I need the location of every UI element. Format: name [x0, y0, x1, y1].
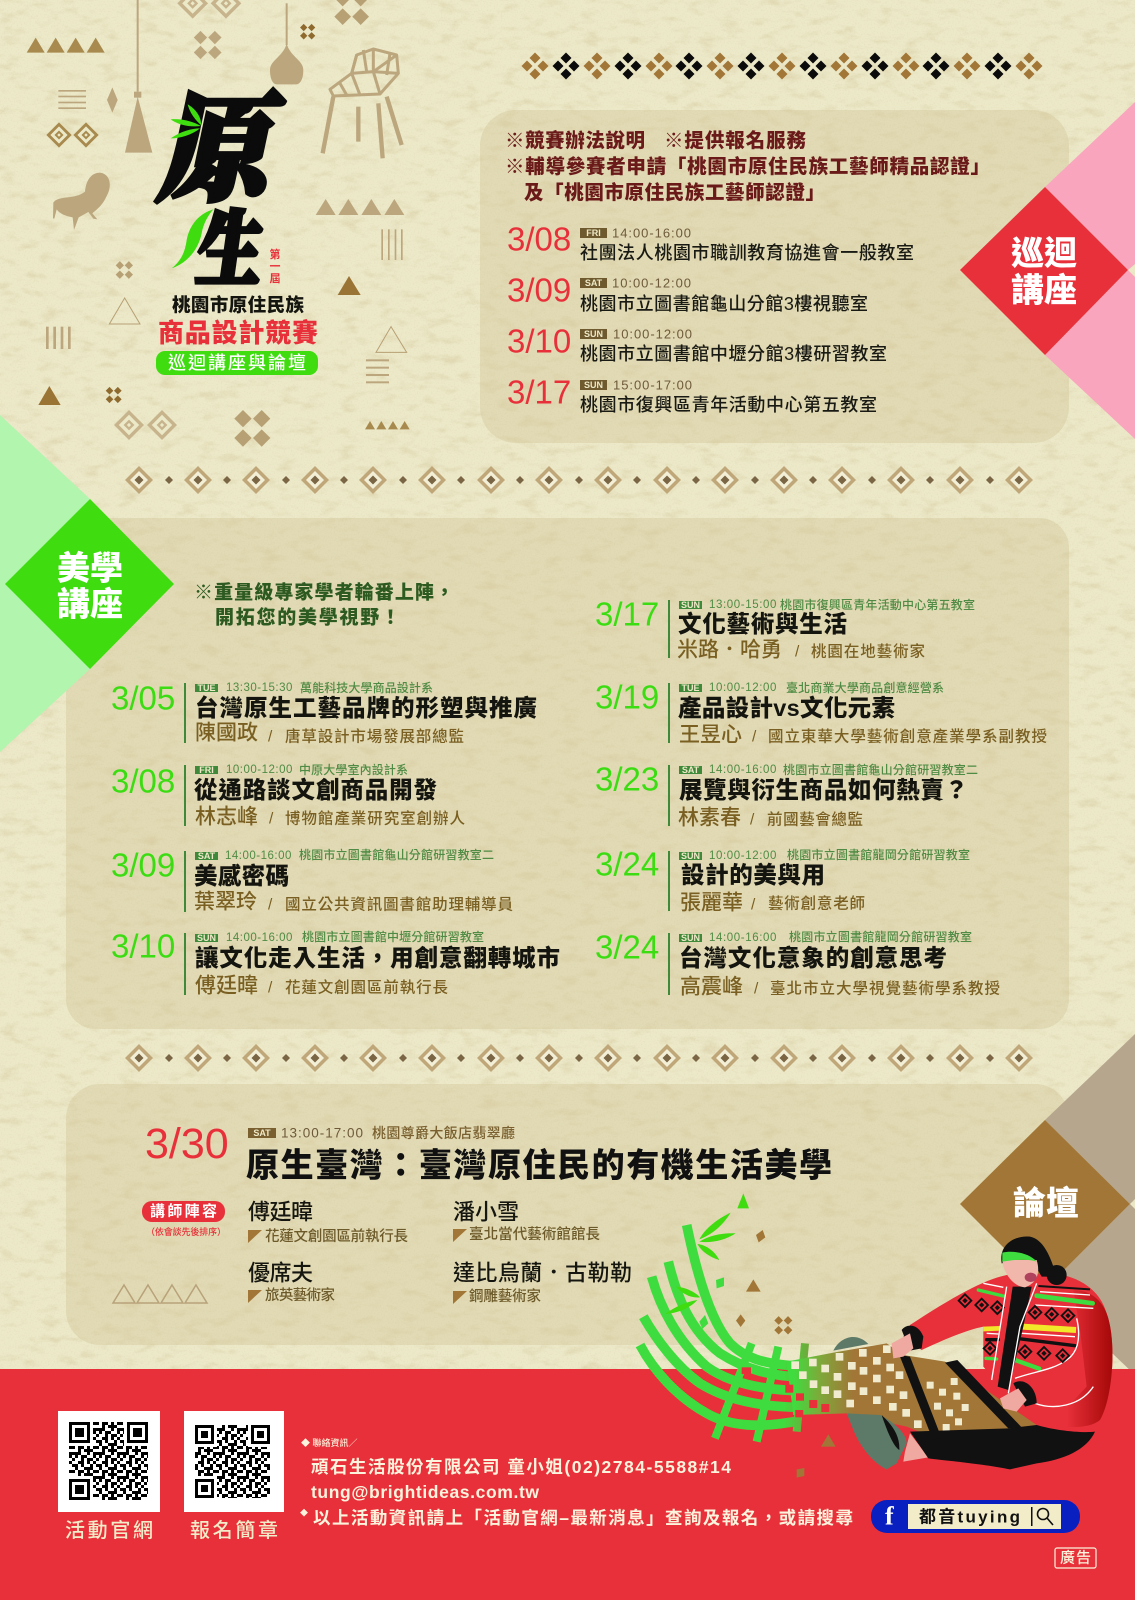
talk 3/17: 桃園市復興區青年活動中心第五教室: [780, 597, 975, 612]
tour row 3/09: 10:00-12:00: [612, 276, 691, 290]
talk 3/08: [111, 762, 465, 828]
icon: round pendant lamp: [270, 3, 303, 84]
contact note: 以上活動資訊請上「活動官網–最新消息」查詢及報名，或請搜尋: [313, 1508, 853, 1528]
talk 3/08: 博物館產業研究室創辦人: [285, 808, 465, 828]
talk 3/24 afternoon: 台灣文化意象的創意思考: [679, 944, 947, 971]
four diamonds brown small: [106, 387, 122, 403]
talk 3/17: 米路．哈勇: [677, 638, 782, 662]
talk 3/23: 前國藝會總監: [767, 810, 863, 828]
tour notes: ※競賽辦法說明: [505, 129, 645, 152]
weave gaps: [742, 1367, 829, 1417]
forum session info: 13:00-17:00: [281, 1126, 363, 1140]
vertical bars right: [381, 229, 403, 260]
tour row 3/08: 14:00-16:00: [612, 226, 691, 240]
talk 3/05: 陳國政: [195, 722, 258, 744]
talk 3/24 afternoon: [595, 928, 1000, 998]
black skirt: [910, 1425, 1095, 1469]
diamond band top: [522, 52, 1042, 80]
talk 3/19: 3/19: [595, 678, 659, 716]
outline triangle right: [376, 327, 407, 352]
talk 3/17: 桃園在地藝術家: [811, 642, 925, 660]
icon: tall diamond: [107, 87, 118, 113]
scattered shapes: [699, 1193, 836, 1478]
tour notes: [505, 129, 990, 204]
tour row 3/10: 10:00-12:00: [613, 326, 692, 342]
taupe side diamonds: [1045, 1034, 1135, 1375]
QR label: 活動官網: [65, 1519, 153, 1542]
advertisement mark: 廣告: [1060, 1548, 1091, 1566]
icon: lounge chair: [53, 173, 110, 230]
contact label: ◆ 聯絡資訊／: [301, 1437, 358, 1448]
talk 3/08: /: [269, 810, 274, 828]
talk 3/19: 國立東華大學藝術創意產業學系副教授: [768, 726, 1047, 746]
speaker 1: 花蓮文創園區前執行長: [265, 1227, 408, 1245]
talk 3/24 morning: 10:00-12:00: [709, 850, 777, 862]
talk 3/17: 13:00-15:00: [709, 599, 777, 611]
four diamonds bottom: [234, 410, 270, 447]
speaker 2: 臺北當代藝術館館長: [469, 1225, 600, 1243]
talk 3/23: 林素春: [678, 806, 741, 830]
facebook search pill: f: [885, 1502, 894, 1530]
QR label: 報名簡章: [190, 1519, 278, 1542]
woven green strips: [640, 1225, 807, 1442]
speaker badge: 講師陣容: [150, 1202, 217, 1220]
talk 3/10: [111, 928, 560, 998]
green diamond badge: aesthetics lectures: 講座: [57, 586, 123, 622]
talk 3/09: 3/09: [111, 846, 175, 884]
tour row 3/09: [507, 272, 868, 314]
tour row 3/09: 桃園市立圖書館龜山分館3樓視聽室: [580, 294, 868, 314]
horizontal lines right: [366, 359, 389, 383]
talk 3/24 morning: 3/24: [595, 846, 659, 882]
panel: tour lectures background: [480, 110, 1069, 443]
speaker 2: 潘小雪: [453, 1200, 519, 1224]
talk 3/10: 3/10: [111, 928, 175, 964]
bamboo leaves: [665, 1213, 736, 1314]
contact note: ◆: [300, 1508, 308, 1518]
tour row 3/17: 15:00-17:00: [613, 378, 692, 392]
panel: tour lectures content: [505, 129, 990, 415]
talk 3/09: /: [268, 896, 273, 914]
talk 3/19: 10:00-12:00: [709, 682, 777, 694]
talk 3/24 morning: 設計的美與用: [681, 861, 825, 888]
tour row 3/10: [507, 322, 887, 364]
decorative icons around logo: [27, 0, 410, 447]
speaker badge: （依會談先後排序）: [146, 1226, 226, 1237]
dotted divider 2: [125, 1044, 1033, 1072]
red footer band: [0, 1369, 1135, 1600]
tour row 3/17: 桃園市復興區青年活動中心第五教室: [580, 395, 877, 415]
speaker 3: [248, 1260, 336, 1304]
talk 3/23: 3/23: [595, 760, 659, 798]
talk 3/05: 台灣原生工藝品牌的形塑與推廣: [195, 694, 537, 721]
speaker 3: 旅英藝術家: [265, 1286, 336, 1304]
advertisement mark: [1055, 1548, 1096, 1568]
outline triangles: [113, 1285, 207, 1303]
facebook search pill: 都音tuying: [919, 1506, 1020, 1526]
forum date: 3/30: [145, 1120, 229, 1168]
nested diamonds bottom: [114, 410, 177, 440]
talk 3/23: 14:00-16:00: [709, 764, 777, 776]
icon: green bamboo leaves: [171, 104, 213, 268]
forum session info: 桃園尊爵大飯店翡翠廳: [372, 1125, 515, 1141]
talk 3/10: 14:00-16:00: [226, 932, 293, 944]
green diamond badge: aesthetics lectures: 美學: [57, 550, 123, 586]
talk 3/24 morning: 桃園市立圖書館龍岡分館研習教室: [787, 847, 970, 862]
forum session info: [248, 1125, 515, 1141]
panel: forum background: [66, 1084, 1069, 1345]
forum title: 原生臺灣：臺灣原住民的有機生活美學: [246, 1146, 832, 1184]
edition label: 屆: [270, 272, 280, 285]
aesthetics intro text: 開拓您的美學視野！: [215, 606, 400, 628]
speaker 4: 鋼雕藝術家: [469, 1287, 542, 1305]
talk 3/05: /: [268, 728, 273, 746]
icon: lines motif: [58, 90, 86, 109]
talk 3/19: TUE: [682, 683, 700, 693]
dotted divider 1: [125, 466, 1033, 494]
talk 3/08: 3/08: [111, 762, 175, 800]
talk 3/24 afternoon: 3/24: [595, 928, 659, 966]
nested diamonds top: [177, 0, 241, 19]
illustration: weaving woman: [640, 1193, 1112, 1478]
talk 3/08: FRI: [199, 765, 214, 775]
contact email: tung@brightideas.com.tw: [311, 1482, 539, 1502]
grey-green knee cloth: [833, 1337, 907, 1469]
black collar panel: [992, 1283, 1037, 1393]
talk 3/24 morning: /: [751, 896, 756, 914]
aesthetics intro text: ※重量級專家學者輪番上陣，: [194, 580, 454, 604]
logo: [149, 58, 318, 375]
talk 3/09: 葉翠玲: [194, 890, 257, 914]
talk 3/24 afternoon: 桃園市立圖書館龍岡分館研習教室: [789, 929, 972, 944]
logo pill: 巡迴講座與論壇: [168, 352, 306, 373]
talk 3/17: SUN: [681, 600, 700, 610]
tour notes: ※輔導參賽者申請「桃園市原住民族工藝師精品認證」: [505, 155, 990, 178]
QR code: event website: [58, 1411, 160, 1542]
talk 3/19: 臺北商業大學商品創意經營系: [786, 680, 944, 695]
talk 3/19: [595, 678, 1047, 746]
talk 3/09: 美感密碼: [194, 862, 289, 889]
speaker 1: 傅廷暐: [248, 1200, 313, 1224]
tour row 3/10: 3/10: [507, 322, 571, 360]
talk 3/10: 讓文化走入生活，用創意翻轉城市: [195, 944, 560, 971]
talk 3/24 afternoon: 高震峰: [680, 976, 743, 998]
tour row 3/08: 社團法人桃園市職訓教育協進會一般教室: [580, 242, 914, 263]
forum session info: SAT: [253, 1128, 271, 1138]
tour row 3/10: SUN: [584, 329, 603, 339]
red jacket: [903, 1273, 1112, 1429]
talk 3/24 afternoon: /: [754, 980, 759, 998]
brown triangle left: [38, 386, 61, 405]
talk 3/09: 桃園市立圖書館龜山分館研習教室二: [299, 847, 494, 862]
talk 3/24 morning: SUN: [681, 851, 700, 861]
talk 3/24 afternoon: SUN: [681, 933, 700, 943]
talk 3/09: SAT: [198, 851, 216, 861]
talk 3/10: 傅廷暐: [195, 974, 258, 998]
panel: aesthetics lectures background: [66, 518, 1069, 1029]
tour row 3/17: SUN: [584, 380, 603, 390]
QR code: registration: [184, 1411, 284, 1542]
tour row 3/10: 桃園市立圖書館中壢分館3樓研習教室: [580, 344, 887, 364]
talk 3/24 morning: 藝術創意老師: [768, 894, 865, 912]
green diamond badge: aesthetics lectures: [5, 499, 174, 669]
talk 3/08: 10:00-12:00: [226, 764, 293, 776]
talk 3/19: 王昱心: [679, 724, 742, 746]
red diamond badge: tour lectures: [960, 187, 1128, 355]
light green side diamonds: [0, 415, 90, 752]
talk 3/17: [595, 596, 975, 662]
talk 3/10: SUN: [197, 933, 216, 943]
contact company: 頑石生活股份有限公司 童小姐(02)2784-5588#14: [311, 1457, 731, 1477]
talk 3/10: 花蓮文創園區前執行長: [285, 978, 448, 996]
four diamonds cluster: [194, 31, 222, 59]
speaker badge: [142, 1201, 226, 1237]
tour row 3/17: 3/17: [507, 374, 571, 410]
four diamonds small: [300, 24, 315, 39]
triangle row right: [316, 199, 404, 215]
jacket diamonds: [957, 1293, 1076, 1363]
talk 3/24 afternoon: 14:00-16:00: [709, 932, 777, 944]
pink foot: [903, 1433, 928, 1462]
edition label: [270, 247, 280, 285]
speaker 1: [248, 1200, 408, 1245]
facebook search pill: [871, 1500, 1080, 1533]
tour notes: ※提供報名服務: [664, 129, 806, 152]
tour notes: 及「桃園市原住民族工藝師認證」: [524, 181, 825, 204]
four diamonds top right: [334, 0, 369, 25]
speaker 3: 優席夫: [248, 1260, 313, 1286]
tour row 3/09: 3/09: [507, 272, 571, 308]
nested diamonds left: [46, 122, 99, 148]
talk 3/09: 14:00-16:00: [225, 850, 292, 862]
talk 3/09: 國立公共資訊圖書館助理輔導員: [285, 894, 513, 914]
brown diamond badge: forum: [960, 1120, 1130, 1289]
talk 3/19: /: [752, 728, 757, 746]
cream squares: [791, 1345, 969, 1431]
contact info: [300, 1437, 853, 1528]
brown triangle right: [338, 276, 361, 295]
brown woven cloth: [787, 1343, 1037, 1438]
tour row 3/17: [507, 374, 877, 415]
head: [1001, 1236, 1067, 1287]
talk 3/23: SAT: [682, 765, 700, 775]
talk 3/05: 3/05: [111, 680, 175, 716]
talk 3/05: TUE: [198, 683, 216, 693]
brown diamond badge: forum: 論壇: [1013, 1184, 1079, 1222]
talk 3/05: 唐草設計市場發展部總監: [285, 726, 464, 746]
talk 3/05: 萬能科技大學商品設計系: [300, 680, 433, 695]
talk 3/17: 文化藝術與生活: [678, 610, 847, 637]
talk 3/10: 桃園市立圖書館中壢分館研習教室: [302, 929, 484, 944]
black loom straps: [899, 1355, 1022, 1439]
talk 3/08: 中原大學室內設計系: [299, 762, 408, 777]
talk 3/10: /: [268, 980, 273, 996]
edition label: 一: [270, 261, 280, 273]
talk 3/05: [111, 680, 537, 746]
icon: geometric chair: [323, 49, 402, 158]
logo line: contest name: 商品設計競賽: [158, 318, 318, 348]
talk 3/23: 桃園市立圖書館龜山分館研習教室二: [783, 762, 978, 777]
red diamond badge: tour lectures: 巡迴: [1011, 234, 1077, 272]
talk 3/08: 從通路談文創商品開發: [194, 776, 438, 803]
talk 3/05: 13:30-15:30: [226, 682, 293, 694]
four diamonds mid left: [116, 261, 133, 279]
logo character: origin: 原: [149, 58, 304, 224]
logo line: city indigenous: 桃園市原住民族: [172, 294, 304, 316]
logo character: birth: 生: [192, 185, 272, 303]
talk 3/17: 3/17: [595, 596, 659, 632]
jacket shading: [1050, 1290, 1112, 1427]
tour row 3/09: SAT: [585, 278, 603, 288]
hands and cuffs: [892, 1326, 1037, 1412]
talk 3/23: /: [750, 812, 755, 828]
small triangle row: [365, 421, 410, 429]
jacket patterns: [978, 1283, 1093, 1406]
pink side diamonds: [1045, 102, 1135, 439]
speaker 2: [453, 1200, 600, 1243]
forum heading: [145, 1120, 832, 1184]
outline triangle left: [109, 298, 140, 324]
talk 3/19: 產品設計vs文化元素: [678, 694, 895, 721]
talk 3/24 afternoon: 臺北市立大學視覺藝術學系教授: [770, 978, 1000, 998]
aesthetics intro text: [194, 580, 454, 628]
talk 3/09: [111, 846, 513, 914]
icon: cone pendant lamp: [125, 0, 152, 153]
tour row 3/08: [507, 220, 914, 263]
red diamond badge: tour lectures: 講座: [1011, 272, 1077, 308]
triangle row top left: [27, 38, 105, 53]
talk 3/23: 展覽與衍生商品如何熱賣？: [679, 776, 968, 803]
talk 3/17: /: [795, 644, 800, 660]
edition label: 第: [270, 247, 280, 261]
tour row 3/08: 3/08: [507, 220, 571, 258]
tour row 3/08: FRI: [586, 228, 601, 238]
talk 3/24 morning: [595, 846, 970, 914]
vertical bars left: [46, 327, 71, 349]
talk 3/24 morning: 張麗華: [680, 892, 743, 914]
speaker 4: 達比烏蘭．古勒勒: [453, 1260, 632, 1286]
speaker 4: [453, 1260, 632, 1305]
talk 3/23: [595, 760, 978, 830]
talk 3/08: 林志峰: [195, 806, 258, 828]
